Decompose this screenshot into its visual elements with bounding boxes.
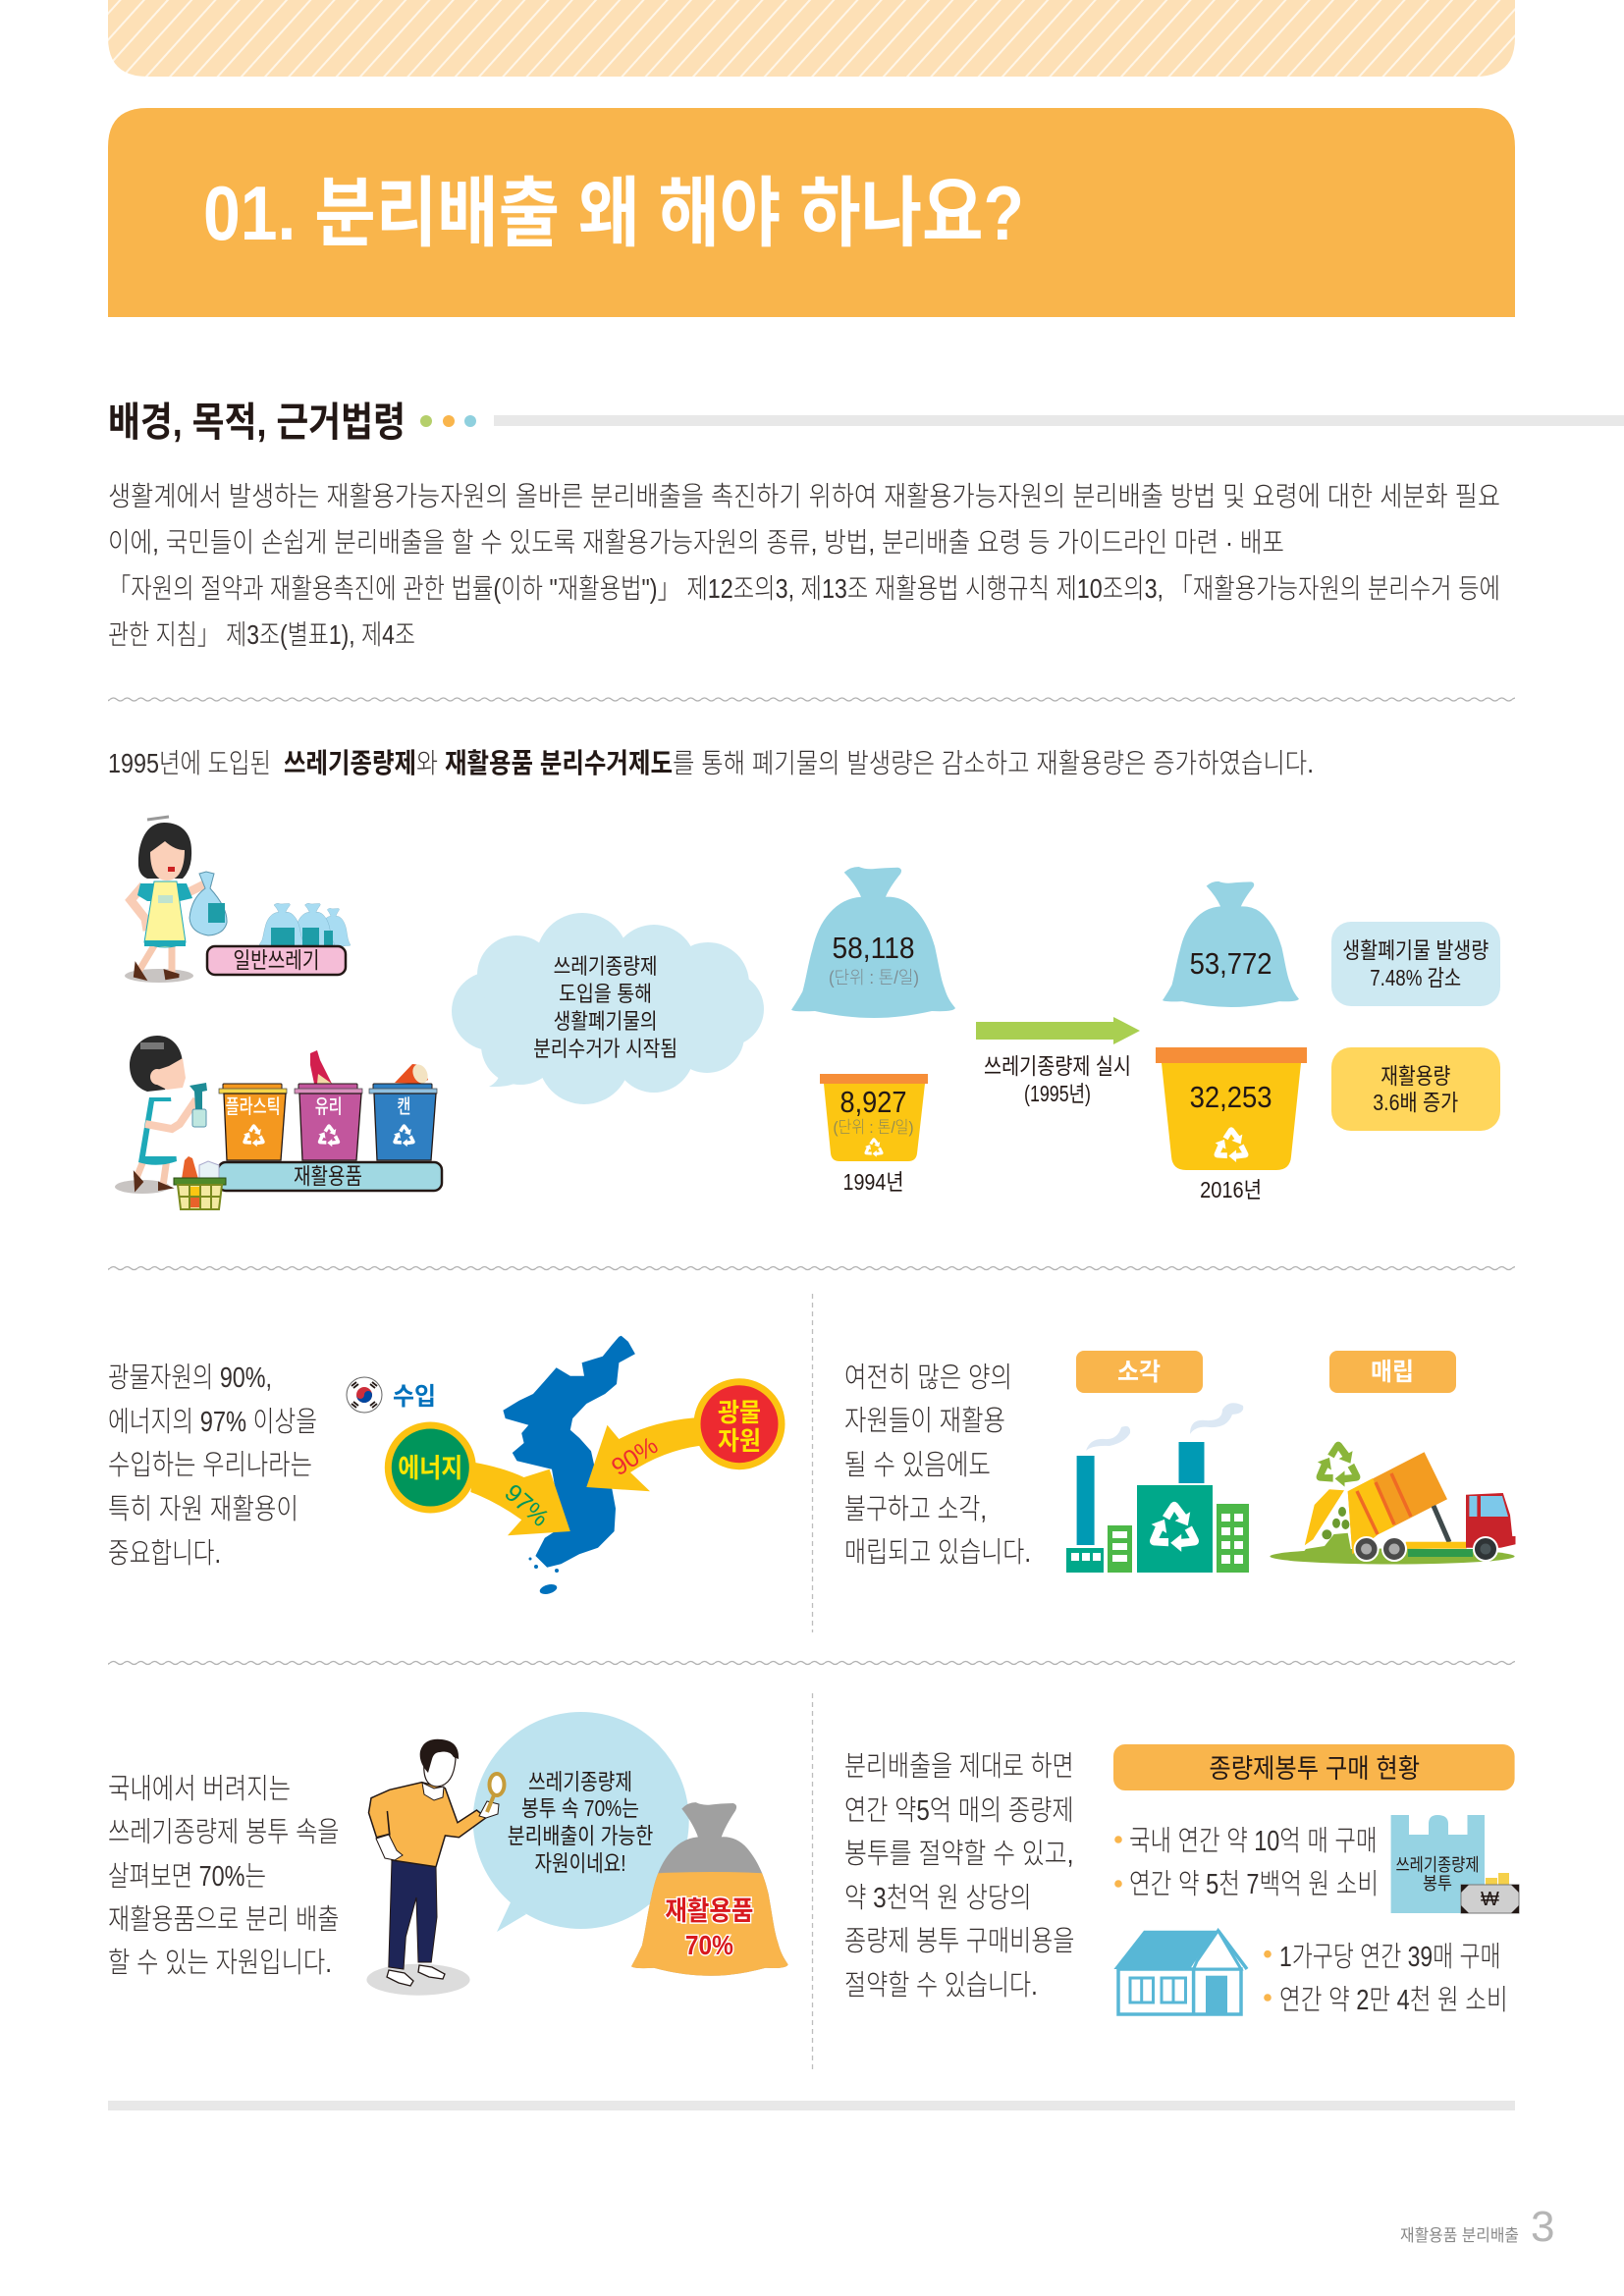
bin label: glass: 유리 xyxy=(315,1095,343,1118)
bin label: can: 캔 xyxy=(397,1095,410,1118)
callout: waste decrease: 생활폐기물 발생량 xyxy=(1342,937,1489,963)
text: savings: 절약할 수 있습니다. xyxy=(844,1969,1038,2002)
2016 recycling bin xyxy=(1156,1047,1307,1170)
text: bags content: 쓰레기종량제 봉투 속을 xyxy=(108,1817,340,1848)
footer xyxy=(1400,2203,1554,2251)
callout: cloud xyxy=(452,913,764,1104)
text: mineral import: 광물자원의 90%, xyxy=(108,1362,272,1394)
icon: incineration factory xyxy=(1066,1403,1249,1573)
circle: energy xyxy=(388,1425,472,1510)
bubble text: 분리배출이 가능한 xyxy=(508,1823,653,1848)
text: savings: 봉투를 절약할 수 있고, xyxy=(844,1838,1074,1870)
intro sentence: 재활용품 분리수거제도 xyxy=(445,748,673,778)
callout: waste decrease xyxy=(1331,922,1500,1006)
label: landfill: 매립 xyxy=(1371,1359,1414,1386)
household stats list: 1가구당 연간 39매 구매 xyxy=(1279,1942,1501,1973)
arrow caption: 쓰레기종량제 실시 xyxy=(984,1053,1131,1079)
1994 waste bag: (단위 : 톤/일) xyxy=(829,968,919,988)
label: general waste: 일반쓰레기 xyxy=(234,947,320,973)
cloud text: 도입을 통해 xyxy=(559,982,652,1006)
label: recyclables xyxy=(218,1162,442,1191)
callout: waste decrease: 7.48% 감소 xyxy=(1370,965,1461,990)
icon: volume-rate bag xyxy=(1391,1815,1485,1913)
cloud text: 쓰레기종량제 xyxy=(554,954,658,979)
callout: recycling increase: 3.6배 증가 xyxy=(1373,1090,1458,1115)
bubble text xyxy=(508,1769,653,1876)
text: mineral import: 중요합니다. xyxy=(108,1538,221,1570)
text: incineration and landfill: 여전히 많은 양의 xyxy=(844,1362,1012,1394)
label: incineration: 소각 xyxy=(1117,1359,1161,1386)
icon: blue can bin xyxy=(369,1062,437,1160)
text: mineral import: 수입하는 우리나라는 xyxy=(108,1450,312,1481)
label: general waste xyxy=(207,946,346,975)
household stats list xyxy=(1264,1942,1508,2016)
title: 01. 분리배출 왜 해야 하나요? xyxy=(203,170,1024,256)
icon: house xyxy=(1113,1931,1247,2014)
heading text: 배경, 목적, 근거법령 xyxy=(108,400,406,445)
bag: 70 percent recyclables: 70% xyxy=(685,1930,733,1960)
arrow: energy 97% xyxy=(470,1463,570,1535)
intro sentence: 쓰레기종량제 xyxy=(284,748,416,778)
text: savings xyxy=(844,1751,1074,2002)
top hatched band xyxy=(108,0,1515,77)
bin label: plastic: 플라스틱 xyxy=(226,1095,281,1118)
heading: bag purchase status xyxy=(1113,1744,1515,1790)
cloud text: 생활폐기물의 xyxy=(554,1009,658,1034)
icon: money xyxy=(1461,1873,1519,1913)
intro sentence: 를 통해 폐기물의 발생량은 감소하고 재활용량은 증가하였습니다. xyxy=(673,748,1314,778)
text: incineration and landfill: 매립되고 있습니다. xyxy=(844,1537,1031,1569)
text: savings: 연간 약5억 매의 종량제 xyxy=(844,1795,1074,1827)
illustration: woman with recyclables xyxy=(115,1036,207,1194)
circle: mineral resources: 광물 xyxy=(718,1398,761,1427)
2016 waste bag: 53,772 xyxy=(1190,946,1272,981)
background text block: 관한 지침」 제3조(별표1), 제4조 xyxy=(108,619,415,650)
intro sentence: 와 xyxy=(416,748,438,778)
text: bags content: 살펴보면 70%는 xyxy=(108,1861,266,1893)
icon: orange plastic bin xyxy=(219,1084,287,1160)
heading: bag purchase status: 종량제봉투 구매 현황 xyxy=(1209,1754,1420,1784)
label: landfill xyxy=(1329,1351,1456,1393)
national stats list: 연간 약 5천 7백억 원 소비 xyxy=(1129,1869,1379,1900)
icon: general waste bags xyxy=(259,903,351,947)
section heading xyxy=(108,400,1624,445)
illustration: woman with general waste xyxy=(125,817,227,983)
icon: money: ₩ xyxy=(1481,1889,1499,1910)
text: bags content: 재활용품으로 분리 배출 xyxy=(108,1904,340,1936)
text: savings: 종량제 봉투 구매비용을 xyxy=(844,1926,1074,1957)
label: import: 수입 xyxy=(393,1383,436,1411)
icon: basket xyxy=(174,1156,226,1209)
bubble text: 봉투 속 70%는 xyxy=(521,1795,639,1821)
cloud text xyxy=(533,954,677,1061)
callout: speech bubble xyxy=(473,1712,689,1932)
map: Korean peninsula xyxy=(503,1336,635,1596)
1994 recycling bin: (단위 : 톤/일) xyxy=(833,1118,913,1137)
1994 waste bag: 58,118 xyxy=(833,931,915,965)
arrow caption: (1995년) xyxy=(1024,1081,1091,1106)
footer: 3 xyxy=(1531,2203,1554,2251)
text: mineral import xyxy=(108,1362,317,1570)
text: savings: 분리배출을 제대로 하면 xyxy=(844,1751,1074,1783)
2016 recycling bin: 32,253 xyxy=(1190,1080,1272,1114)
footer: 재활용품 분리배출 xyxy=(1400,2226,1519,2245)
cloud text: 분리수거가 시작됨 xyxy=(533,1037,677,1061)
text: incineration and landfill: 자원들이 재활용 xyxy=(844,1406,1005,1437)
label: 1994: 1994년 xyxy=(842,1169,903,1195)
household stats list: 연간 약 2만 4천 원 소비 xyxy=(1279,1985,1508,2016)
text: savings: 약 3천억 원 상당의 xyxy=(844,1883,1032,1914)
text: incineration and landfill: 불구하고 소각, xyxy=(844,1494,987,1525)
icon: Korean flag xyxy=(347,1377,382,1413)
illustration: man with magnifier xyxy=(366,1739,505,1996)
label: incineration xyxy=(1076,1351,1203,1393)
icon: dump truck at landfill xyxy=(1270,1442,1516,1565)
background text block xyxy=(108,481,1500,650)
circle: energy: 에너지 xyxy=(398,1454,462,1483)
bag: 70 percent recyclables xyxy=(631,1802,788,1976)
callout: recycling increase: 재활용량 xyxy=(1380,1063,1450,1089)
1994 recycling bin xyxy=(820,1074,928,1161)
national stats list xyxy=(1114,1826,1379,1900)
national stats list: 국내 연간 약 10억 매 구매 xyxy=(1129,1826,1377,1857)
text: bags content xyxy=(108,1774,340,1979)
label: 2016: 2016년 xyxy=(1200,1177,1262,1202)
background text block: 생활계에서 발생하는 재활용가능자원의 올바른 분리배출을 촉진하기 위하여 재활용가능자원의 분리배출 방법 및 요령에 대한 세분화 필요 xyxy=(108,481,1500,511)
icon: pink glass bin xyxy=(295,1050,362,1160)
label: recyclables: 재활용품 xyxy=(294,1163,362,1189)
1994 waste bag xyxy=(791,867,955,1018)
circle: mineral resources xyxy=(697,1382,782,1467)
text: incineration and landfill: 될 수 있음에도 xyxy=(844,1450,991,1481)
arrow: minerals 90% xyxy=(586,1417,700,1491)
bag: 70 percent recyclables: 재활용품 xyxy=(665,1896,753,1926)
2016 waste bag xyxy=(1163,881,1299,1007)
text: mineral import: 특히 자원 재활용이 xyxy=(108,1494,298,1525)
icon: volume-rate bag: 쓰레기종량제 xyxy=(1396,1855,1479,1875)
callout: recycling increase xyxy=(1331,1047,1500,1131)
icon: volume-rate bag: 봉투 xyxy=(1423,1874,1452,1894)
text: incineration and landfill xyxy=(844,1362,1031,1569)
text: mineral import: 에너지의 97% 이상을 xyxy=(108,1407,317,1438)
arrow: 1995 xyxy=(976,1017,1140,1044)
text: bags content: 할 수 있는 자원입니다. xyxy=(108,1947,332,1979)
bubble text: 자원이네요! xyxy=(534,1850,626,1876)
arrow caption xyxy=(984,1053,1131,1106)
title banner xyxy=(108,108,1515,317)
text: bags content: 국내에서 버려지는 xyxy=(108,1774,291,1805)
1994 recycling bin: 8,927 xyxy=(840,1085,907,1119)
background text block: 이에, 국민들이 손쉽게 분리배출을 할 수 있도록 재활용가능자원의 종류, 방법, 분리배출 요령 등 가이드라인 마련 · 배포 xyxy=(108,527,1284,558)
bubble text: 쓰레기종량제 xyxy=(528,1769,632,1794)
intro sentence: 1995년에 도입된 xyxy=(108,748,271,778)
circle: mineral resources: 자원 xyxy=(718,1426,761,1456)
arrow: minerals 90%: 90% xyxy=(607,1431,663,1481)
intro sentence xyxy=(108,748,1314,778)
arrow: energy 97%: 97% xyxy=(499,1479,554,1532)
